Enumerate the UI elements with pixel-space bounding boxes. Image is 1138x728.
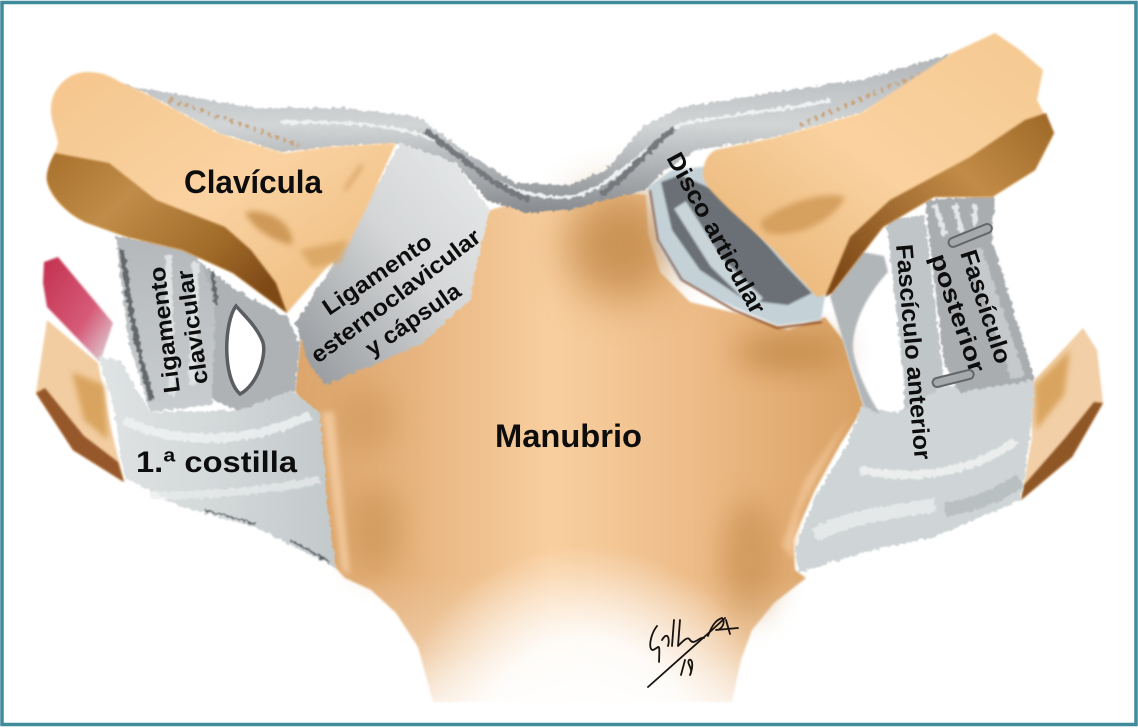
right ligament arch xyxy=(830,252,888,414)
label: Ligamento clavicular: Ligamento xyxy=(144,265,185,395)
right ligament: posterior fascicle xyxy=(925,195,1035,392)
label: Ligamento esternoclavicular y cápsula: Ligamento xyxy=(317,228,436,320)
right first rib bone xyxy=(1021,328,1103,500)
articular disc xyxy=(648,165,825,328)
label: Fascículo posterior: posterior xyxy=(924,250,990,376)
right rib cartilage xyxy=(795,380,1035,573)
left first rib bone xyxy=(36,320,124,482)
left clavicle xyxy=(47,72,396,313)
left ligament opening xyxy=(227,306,264,394)
label: Ligamento clavicular xyxy=(144,265,213,395)
top ligament band xyxy=(120,53,952,213)
left ligament: clavicular xyxy=(116,236,216,412)
right ligament: anterior fascicle xyxy=(886,215,944,410)
left rib cartilage: 1st rib xyxy=(98,357,335,567)
ligament band marks xyxy=(932,223,993,388)
label: Disco articular: Disco articular xyxy=(661,148,771,319)
label: Fascículo posterior xyxy=(924,247,1016,376)
label: Ligamento clavicular: clavicular xyxy=(171,268,213,386)
label: Ligamento esternoclavicular y cápsula: esternoclavicular xyxy=(305,223,486,368)
label: Clavícula: Clavícula xyxy=(184,164,322,200)
left ligament arc xyxy=(200,262,300,412)
label: Fascículo anterior: Fascículo anterior xyxy=(890,243,936,461)
ligament capsule xyxy=(295,143,490,385)
right clavicle xyxy=(703,33,1054,297)
label: Manubrio: Manubrio xyxy=(495,418,642,454)
artist signature xyxy=(648,618,738,687)
label: Fascículo posterior: Fascículo xyxy=(954,247,1016,367)
manubrium xyxy=(295,190,864,702)
label: 1.ª costilla: 1.ª costilla xyxy=(136,446,297,479)
label: Ligamento esternoclavicular y cápsula: y cápsula xyxy=(360,277,466,361)
muscle: red subclavius xyxy=(43,257,113,362)
